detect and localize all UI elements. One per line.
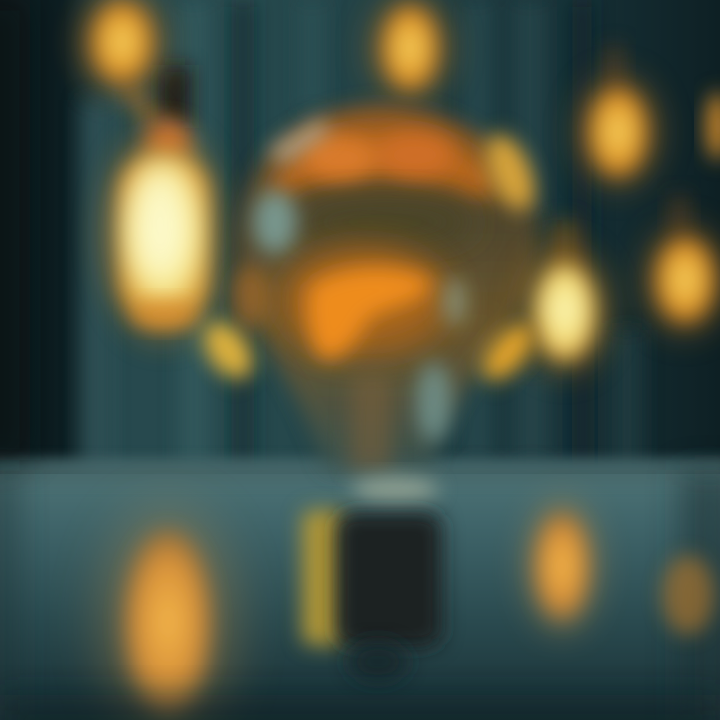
- background wall with curtain stripes: [0, 0, 720, 490]
- lamp: large left: [105, 120, 221, 339]
- bulb screw base: [302, 476, 442, 682]
- lamp: top left: [78, 0, 192, 130]
- lamp: top centre: [368, 0, 452, 102]
- bulb glass body: [235, 105, 540, 470]
- lamp: far right edge: [706, 92, 720, 160]
- reflection: far right lamp: [662, 555, 714, 635]
- bulb left glint: [193, 312, 263, 388]
- bulb mid shadow band: [295, 198, 475, 246]
- bulb right amber glint: [476, 127, 544, 217]
- lamp: right upper: [576, 45, 660, 188]
- bulb orange core: [280, 245, 450, 359]
- reflection: right lamp: [524, 498, 600, 634]
- bulb dome highlight: [304, 133, 453, 180]
- bulb pale glass highlights: [230, 118, 467, 442]
- floor surface: [0, 458, 720, 720]
- reflection: left lamp: [108, 514, 228, 720]
- lamp: right lower: [643, 195, 720, 334]
- bulb upper amber dome: [272, 127, 493, 198]
- lamp: beside bulb right: [472, 220, 609, 390]
- light bulb: [193, 105, 544, 470]
- bulb neck: [348, 375, 392, 470]
